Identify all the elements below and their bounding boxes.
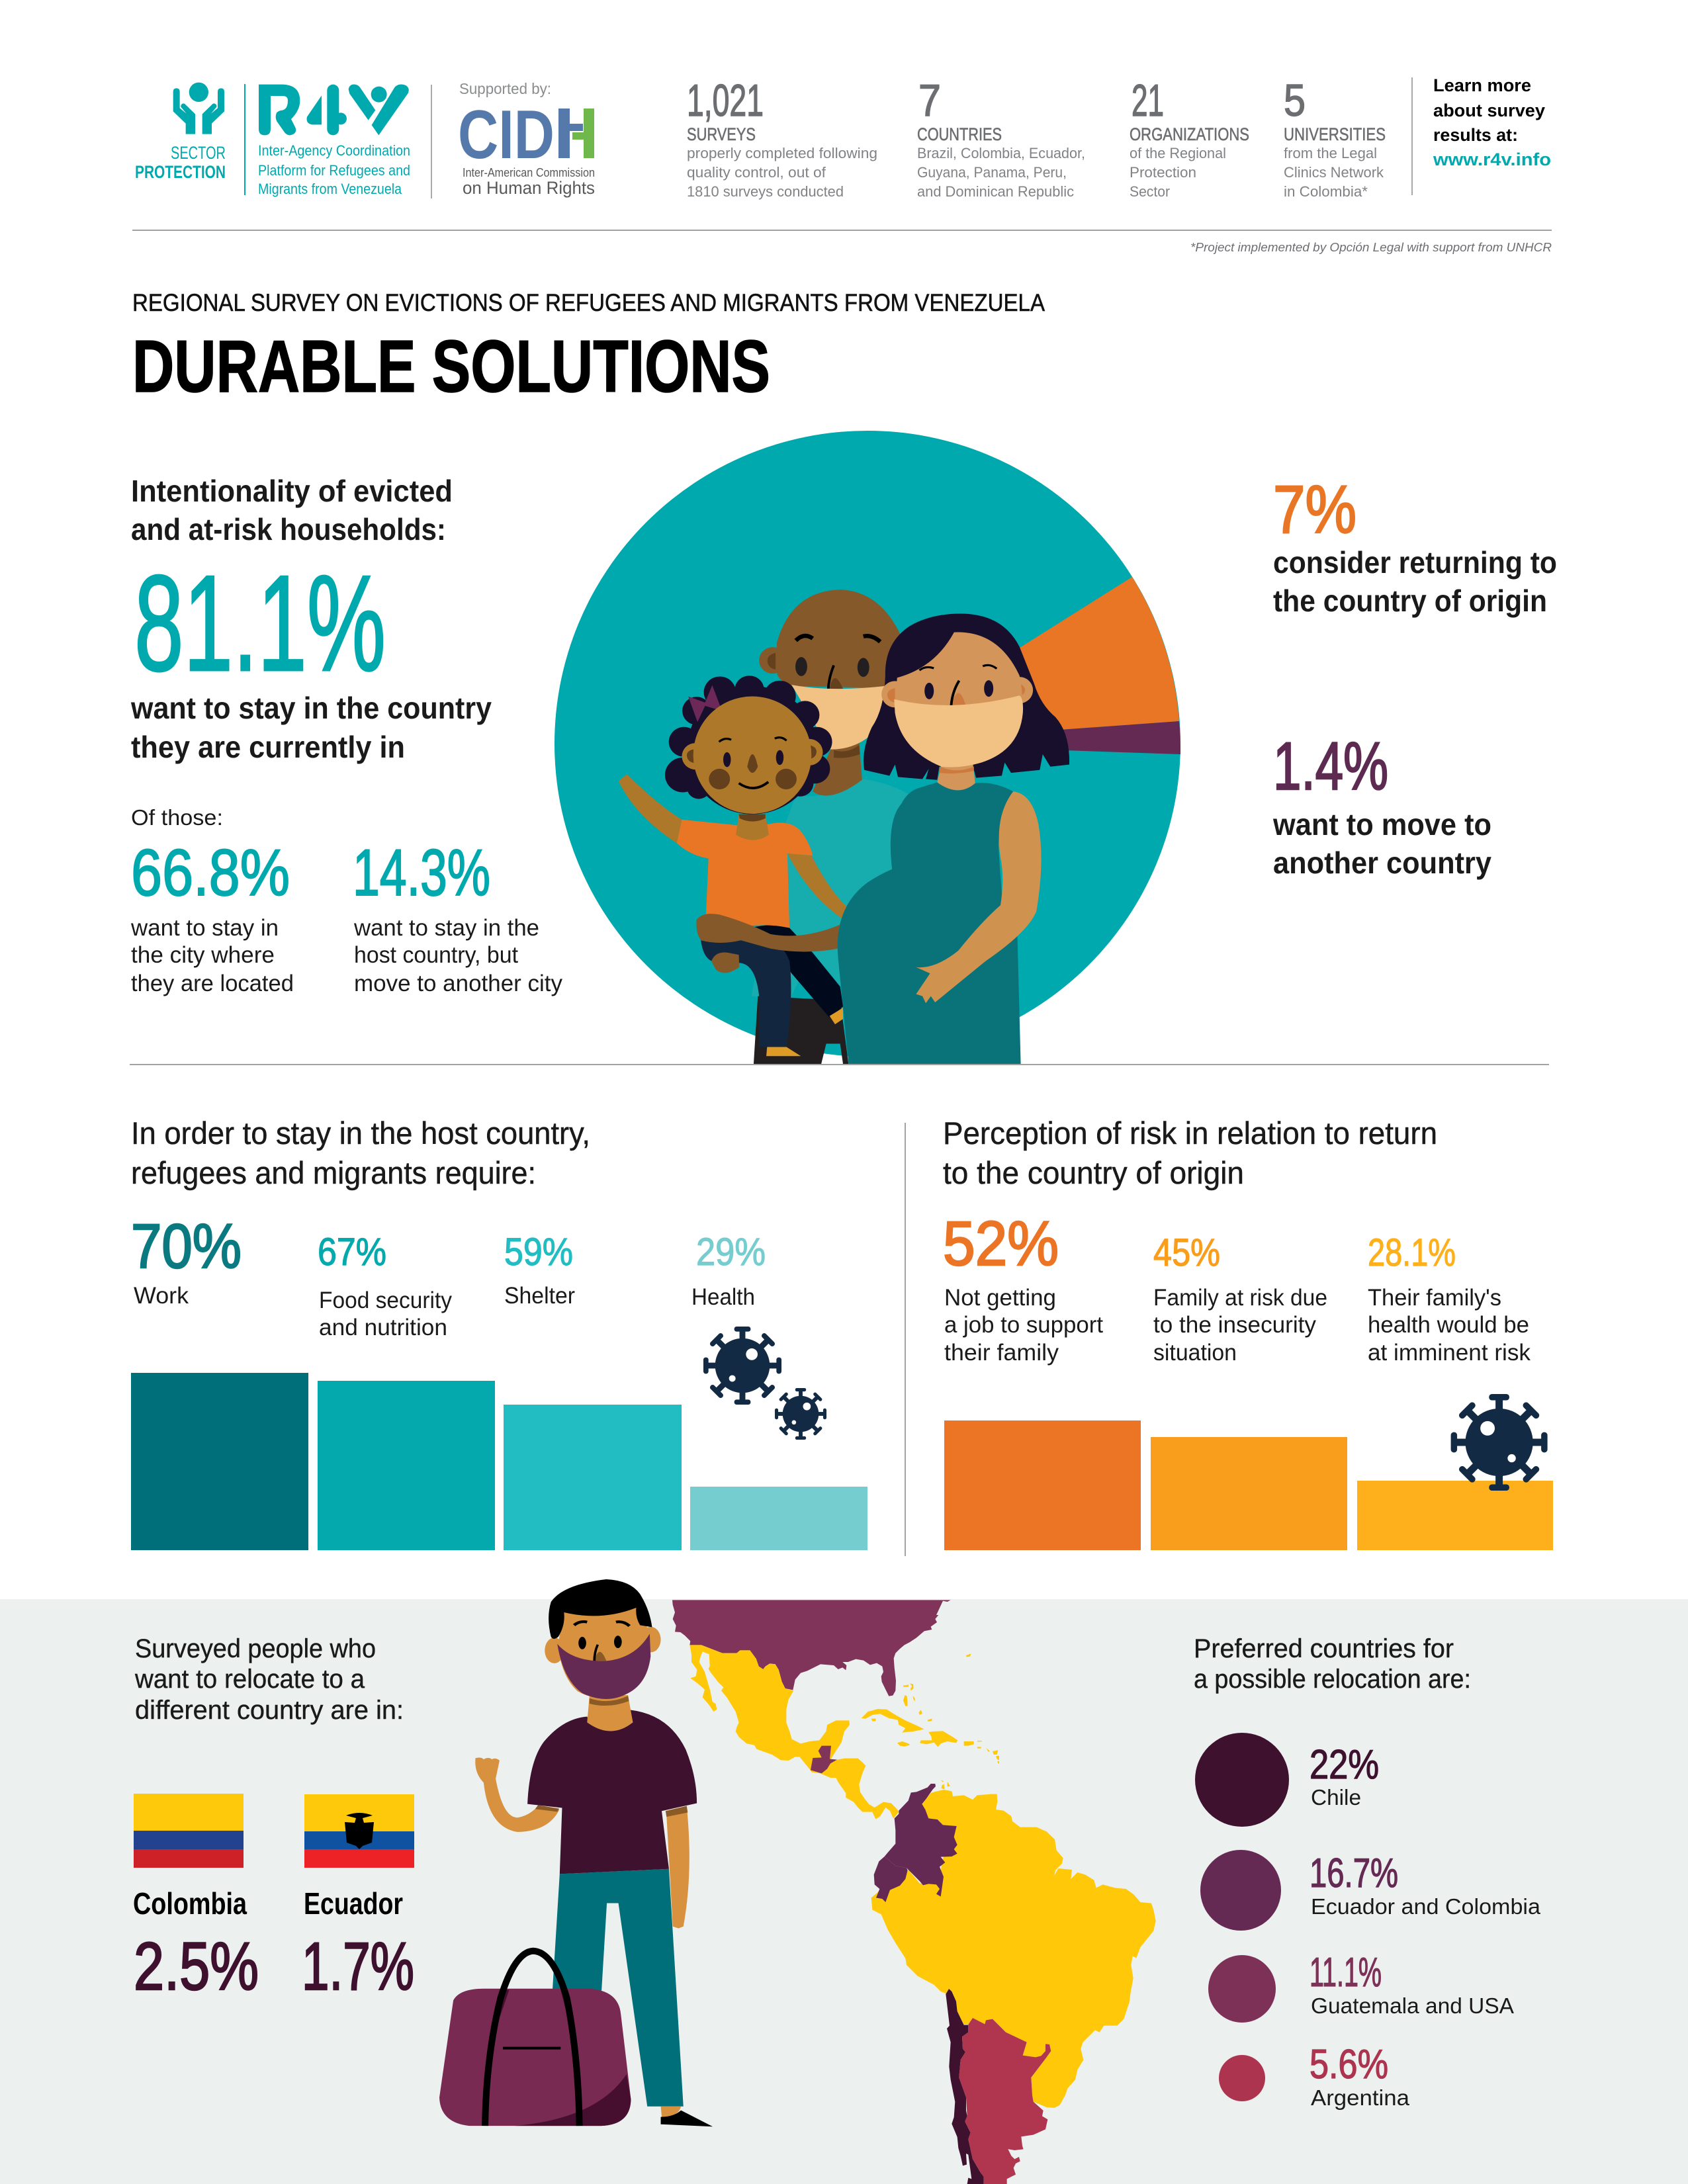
bar: job: 52% [943, 1209, 1059, 1279]
USA [672, 1600, 951, 1696]
panel: intentionality [130, 474, 562, 996]
stat: countries [917, 75, 1085, 200]
heading: In order to stay in the host country, [131, 1115, 590, 1151]
logo: R4V platform: Platform for Refugees and [258, 162, 410, 179]
bar: insecurity: to the insecurity [1153, 1312, 1316, 1338]
heading [1194, 1634, 1471, 1694]
bar: food security: and nutrition [319, 1315, 447, 1340]
child [619, 676, 847, 1056]
pie chart [555, 431, 1180, 1057]
icon: virus small [775, 1388, 826, 1440]
map: Americas [672, 1600, 1156, 2184]
stat caption: want to stay in the country [130, 691, 492, 725]
stat: 14.3%: host country, but [354, 942, 518, 968]
bar: job: a job to support [944, 1312, 1103, 1338]
icon: virus large [703, 1327, 781, 1405]
stat: 1.4% another country [1272, 728, 1491, 880]
title block: REGIONAL SURVEY ON EVICTIONS OF REFUGEES AND MIGRANTS FROM VENEZUELA [132, 289, 1045, 316]
panel: header [132, 75, 1552, 254]
callout: learn more: www.r4v.info [1433, 150, 1551, 169]
stat: Colombia: Colombia [133, 1886, 247, 1921]
stat: countries: and Dominican Republic [917, 183, 1074, 200]
bar: family health: at imminent risk [1368, 1340, 1531, 1366]
stat: surveys: quality control, out of [687, 164, 826, 181]
bar: shelter: 59% [504, 1231, 573, 1274]
heading: and at-risk households: [131, 512, 446, 546]
bar: insecurity [1151, 1231, 1347, 1550]
stat: 7% return [1273, 472, 1557, 618]
flag: Ecuador [304, 1794, 414, 1868]
callout: learn more: Learn more [1433, 75, 1531, 95]
stat: 1.4% another country: 1.4% [1273, 728, 1388, 804]
stat: 1.4% another country: want to move to [1272, 807, 1491, 842]
stat: countries: 7 [918, 75, 941, 126]
stat: surveys: properly completed following [687, 145, 877, 161]
stat: Colombia [133, 1886, 259, 2004]
stat: countries: Guyana, Panama, Peru, [917, 164, 1067, 181]
stat: Colombia: 2.5% [134, 1929, 259, 2004]
of those: Of those: [131, 805, 223, 830]
bar: shelter [504, 1231, 682, 1550]
bar: family health: Their family's [1368, 1285, 1501, 1311]
heading: to the country of origin [943, 1155, 1244, 1190]
item: Guatemala and USA [1208, 1950, 1514, 2023]
item: Argentina: Argentina [1311, 2085, 1410, 2110]
bar: food security [318, 1231, 495, 1550]
item: Ecuador and Colombia: 16.7% [1310, 1851, 1398, 1896]
logo: CIDH: CID [458, 97, 555, 173]
bar: job: Not getting [944, 1285, 1056, 1311]
stat caption [130, 691, 492, 764]
bar: food security: Food security [319, 1288, 452, 1313]
bar: job: their family [944, 1340, 1059, 1366]
stat: universities: UNIVERSITIES [1284, 124, 1386, 144]
item: Chile [1195, 1733, 1379, 1827]
stat: surveys: 1,021 [687, 75, 764, 126]
stat: organizations: Sector [1130, 183, 1170, 200]
item: Guatemala and USA: Guatemala and USA [1311, 1993, 1514, 2018]
logo: sector protection [135, 83, 226, 182]
item: Ecuador and Colombia [1200, 1850, 1541, 1931]
logo: sector protection: SECTOR [171, 143, 226, 163]
stat: organizations: ORGANIZATIONS [1130, 124, 1249, 144]
bar: shelter: Shelter [504, 1283, 575, 1309]
stat: 14.3%: want to stay in the [353, 915, 539, 941]
illustration: family [619, 590, 1069, 1065]
title block: DURABLE SOLUTIONS [132, 326, 770, 408]
stat: 14.3% [353, 836, 562, 996]
bar: job [943, 1209, 1141, 1550]
heading: Intentionality of evicted [131, 474, 453, 508]
stat: 66.8%: they are located [131, 971, 294, 996]
callout: learn more [1411, 75, 1551, 195]
bar: food security: 67% [318, 1231, 386, 1274]
panel: perception of risk bar chart [943, 1115, 1553, 1550]
Guatemala [811, 1746, 837, 1773]
Caribbean islands [862, 1653, 999, 1789]
stat: 66.8%: want to stay in [130, 915, 279, 941]
item: Guatemala and USA: 11.1% [1310, 1950, 1382, 1995]
stat: universities: 5 [1284, 75, 1306, 126]
bag [439, 1951, 631, 2126]
logo: sector protection: PROTECTION [135, 162, 226, 182]
bar: insecurity: situation [1153, 1340, 1237, 1366]
South America [871, 1784, 1156, 2108]
father [752, 590, 914, 1065]
stat: 66.8% [130, 836, 294, 996]
stat: 7% return: 7% [1273, 472, 1356, 547]
stat: surveys: 1810 surveys conducted [687, 183, 844, 200]
mother [838, 614, 1069, 1065]
stat: organizations [1130, 75, 1249, 200]
stat: surveys [687, 75, 877, 200]
heading: a possible relocation are: [1194, 1665, 1471, 1694]
stat: organizations: 21 [1132, 75, 1164, 126]
heading: Preferred countries for [1194, 1634, 1454, 1663]
icon: virus right [1451, 1394, 1548, 1491]
bar: family health: health would be [1368, 1312, 1529, 1338]
heading [943, 1115, 1437, 1190]
callout: learn more: about survey [1433, 101, 1545, 120]
stat: organizations: Protection [1130, 164, 1196, 181]
stat: universities: Clinics Network [1284, 164, 1384, 181]
stat: universities: in Colombia* [1284, 183, 1368, 200]
stat: 14.3%: 14.3% [353, 836, 490, 909]
flag: Colombia [134, 1794, 244, 1868]
bar: health: Health [691, 1284, 755, 1310]
stat: 1.4% another country: another country [1273, 846, 1491, 880]
title block [132, 289, 1045, 408]
logo: CIDH: Inter-American Commission [463, 166, 595, 179]
item: Argentina [1219, 2042, 1410, 2110]
heading: different country are in: [135, 1696, 404, 1725]
item: Argentina: 5.6% [1310, 2042, 1388, 2087]
bar: insecurity: 45% [1153, 1231, 1220, 1274]
bar: health [690, 1231, 867, 1550]
bar: work [131, 1211, 308, 1550]
heading [134, 1634, 404, 1725]
Colombia [885, 1784, 957, 1897]
stat: Ecuador: 1.7% [302, 1929, 414, 2004]
heading: Surveyed people who [135, 1634, 376, 1663]
bar: health: 29% [696, 1231, 766, 1274]
logo: R4V platform [244, 84, 410, 197]
panel: relocation background [0, 1599, 1688, 2184]
bar: family health: 28.1% [1368, 1231, 1456, 1274]
stat: Ecuador: Ecuador [304, 1886, 403, 1921]
logo: CIDH [431, 80, 595, 198]
stat: surveys: SURVEYS [687, 124, 756, 144]
panel: preferred countries [1194, 1634, 1541, 2110]
stat: organizations: of the Regional [1130, 145, 1226, 161]
stat: countries: Brazil, Colombia, Ecuador, [917, 145, 1085, 161]
heading [131, 474, 453, 546]
Argentina [959, 2018, 1051, 2184]
stat: universities [1284, 75, 1386, 200]
logo: CIDH: Supported by: [459, 80, 551, 97]
footnote: *Project implemented by Opción Legal with support from UNHCR [1190, 241, 1552, 254]
logo: R4V platform: Migrants from Venezuela [258, 181, 402, 197]
bar: work: 70% [131, 1211, 242, 1282]
stat: 7% return: consider returning to [1273, 545, 1557, 580]
stat caption: they are currently in [131, 730, 405, 764]
illustration: man with bag [439, 1579, 713, 2126]
item: Chile: Chile [1311, 1785, 1361, 1810]
stat: Ecuador [302, 1886, 414, 2004]
bar: family health [1357, 1231, 1553, 1550]
callout: learn more: results at: [1433, 125, 1518, 145]
item: Chile: 22% [1310, 1742, 1379, 1788]
logo: CIDH: on Human Rights [463, 178, 595, 198]
stat: universities: from the Legal [1284, 145, 1377, 161]
heading [131, 1115, 590, 1190]
stat: 14.3%: move to another city [354, 971, 562, 996]
Ecuador [874, 1856, 908, 1902]
heading: want to relocate to a [134, 1665, 365, 1694]
Mexico and Central America [689, 1645, 899, 1819]
stat: 81.1%: 81.1% [134, 547, 386, 699]
item: Ecuador and Colombia: Ecuador and Colombia [1311, 1894, 1541, 1919]
stat: 7% return: the country of origin [1273, 584, 1547, 618]
heading: Perception of risk in relation to return [943, 1115, 1437, 1151]
heading: refugees and migrants require: [131, 1155, 536, 1190]
stat: 66.8%: the city where [131, 942, 275, 968]
panel: requirements bar chart [131, 1115, 867, 1550]
Chile [946, 1989, 984, 2184]
bar: work: Work [134, 1283, 189, 1309]
logo: R4V platform: Inter-Agency Coordination [258, 142, 410, 159]
stat: countries: COUNTRIES [917, 124, 1002, 144]
panel: relocation countries [133, 1634, 414, 2004]
bar: insecurity: Family at risk due [1153, 1285, 1327, 1311]
stat: 66.8%: 66.8% [131, 836, 290, 909]
